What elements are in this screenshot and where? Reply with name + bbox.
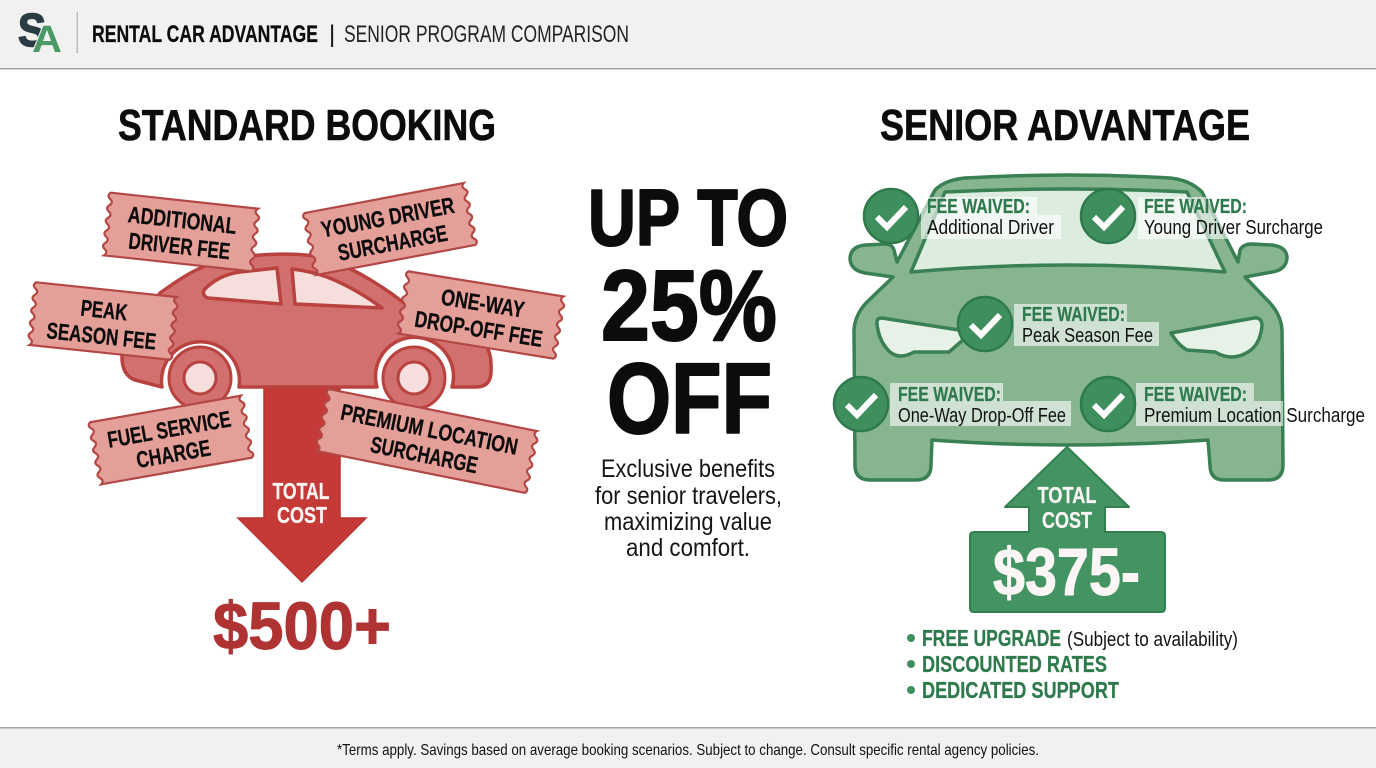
ticket: fuel service charge: CHARGE (134, 434, 213, 473)
benefits list: DEDICATED SUPPORT (922, 677, 1119, 703)
footer: *Terms apply. Savings based on average booking scenarios. Subject to change. Consult specific rental agency policies. (337, 742, 1039, 759)
icon: red car side view (122, 254, 491, 409)
fee waived: peak season fee: FEE WAIVED: (1022, 304, 1125, 326)
heading: senior advantage: SENIOR ADVANTAGE (880, 101, 1250, 150)
callout: up to 25% off (588, 173, 788, 455)
arrow: total cost down: COST (277, 502, 327, 528)
ticket: one-way drop-off fee (396, 271, 566, 359)
callout: up to 25% off: OFF (607, 343, 772, 455)
callout: up to 25% off: 25% (601, 250, 777, 362)
ticket: premium location surcharge: PREMIUM LOCATION (339, 399, 520, 460)
logo: S (18, 4, 46, 56)
arrow: total cost up with value box: TOTAL (1038, 482, 1096, 508)
ticket: young driver surcharge: YOUNG DRIVER (319, 192, 457, 243)
logo: A (32, 19, 62, 61)
arrow: total cost up with value box (970, 447, 1165, 612)
fee waived: premium location surcharge: FEE WAIVED: (1144, 384, 1247, 406)
ticket: fuel service charge (88, 395, 254, 485)
callout: up to 25% off: UP TO (588, 173, 788, 262)
arrow: total cost up with value box: $375- (993, 535, 1140, 610)
fee waived: young driver surcharge (1081, 189, 1323, 243)
benefits list: (Subject to availability) (1067, 629, 1238, 651)
ticket: peak season fee: PEAK (79, 295, 129, 325)
fee waived: young driver surcharge: FEE WAIVED: (1144, 196, 1247, 218)
ticket: one-way drop-off fee: DROP-OFF FEE (413, 306, 545, 352)
fee waived: additional driver (864, 189, 1061, 243)
ticket: young driver surcharge (303, 183, 477, 275)
ticket: peak season fee (28, 282, 178, 360)
heading: standard booking: STANDARD BOOKING (118, 101, 496, 150)
fee waived: peak season fee (958, 297, 1159, 351)
ticket: young driver surcharge: SURCHARGE (336, 220, 450, 266)
ticket: additional driver fee: DRIVER FEE (127, 227, 232, 264)
text block: exclusive benefits: for senior travelers, (595, 482, 782, 510)
ticket: premium location surcharge: SURCHARGE (368, 431, 480, 478)
footer (0, 727, 1376, 768)
ticket: premium location surcharge (315, 389, 539, 493)
logo (18, 4, 62, 61)
ticket: fuel service charge: FUEL SERVICE (105, 406, 233, 453)
fee waived: young driver surcharge: Young Driver Surcharge (1144, 217, 1323, 239)
header title: RENTAL CAR ADVANTAGE (92, 21, 318, 48)
fee waived: peak season fee: Peak Season Fee (1022, 325, 1153, 347)
ticket: peak season fee: SEASON FEE (45, 317, 157, 355)
text block: exclusive benefits (595, 455, 782, 562)
text block: exclusive benefits: Exclusive benefits (601, 455, 775, 483)
fee waived: one-way drop-off fee: One-Way Drop-Off Fee (898, 405, 1066, 427)
fee waived: one-way drop-off fee (834, 377, 1071, 431)
total cost value: $500+: $500+ (213, 589, 391, 664)
text block: exclusive benefits: and comfort. (626, 534, 750, 562)
arrow: total cost down: TOTAL (272, 478, 330, 504)
fee waived: additional driver: FEE WAIVED: (927, 196, 1030, 218)
ticket: additional driver fee: ADDITIONAL (127, 201, 238, 239)
icon: green car front view (850, 175, 1287, 480)
fee waived: one-way drop-off fee: FEE WAIVED: (898, 384, 1001, 406)
fee waived: premium location surcharge (1081, 377, 1365, 431)
fee waived: additional driver: Additional Driver (927, 217, 1054, 239)
benefits list (907, 625, 1238, 703)
header title (92, 21, 629, 48)
benefits list: DISCOUNTED RATES (922, 651, 1107, 677)
header title: SENIOR PROGRAM COMPARISON (344, 21, 629, 48)
ticket: one-way drop-off fee: ONE-WAY (439, 284, 526, 323)
header title: | (329, 21, 335, 48)
arrow: total cost up with value box: COST (1042, 507, 1092, 533)
text block: exclusive benefits: maximizing value (604, 508, 772, 536)
ticket: additional driver fee (102, 192, 260, 272)
benefits list: FREE UPGRADE (922, 625, 1061, 651)
arrow: total cost down (238, 380, 366, 582)
header bar (0, 0, 1376, 70)
